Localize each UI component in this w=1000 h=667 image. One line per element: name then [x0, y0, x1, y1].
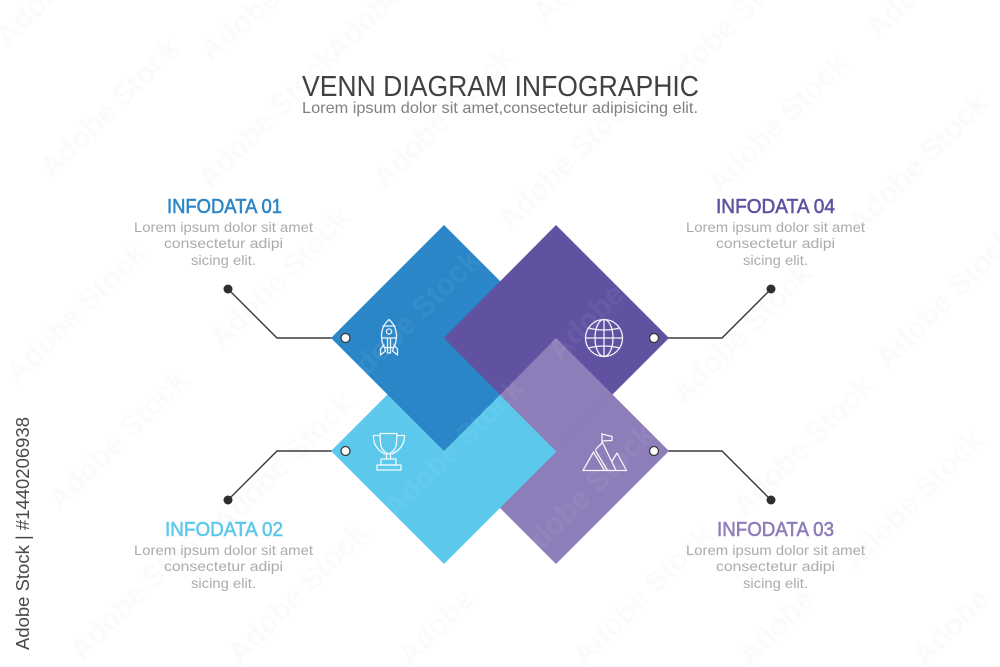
anchor dots [341, 334, 658, 456]
watermark pattern on background: Adobe Stock [64, 514, 217, 667]
diamond: light blue 02 [331, 338, 557, 564]
block: infodata 04 [686, 196, 865, 268]
block: infodata 03: INFODATA 03 [717, 519, 834, 541]
block: infodata 02: Lorem ipsum dolor sit amet [134, 542, 313, 558]
watermark pattern on background: Adobe Stock [34, 32, 187, 185]
block: infodata 01: consectetur adipi [164, 235, 283, 251]
watermark over diamonds: Adobe Stock [542, 214, 695, 367]
block: infodata 03: Lorem ipsum dolor sit amet [686, 542, 865, 558]
block: infodata 04: Lorem ipsum dolor sit amet [686, 219, 865, 235]
icon: rocket [380, 320, 398, 355]
diamond: light purple 03 [443, 338, 669, 564]
block: infodata 04: consectetur adipi [716, 235, 835, 251]
block: infodata 01: sicing elit. [191, 252, 256, 268]
block: infodata 01: Lorem ipsum dolor sit amet [134, 219, 313, 235]
block: infodata 01 [134, 196, 313, 268]
icon: globe [586, 320, 622, 356]
watermark pattern on background: Adobe Stock [0, 237, 153, 390]
watermark pattern on background: Adobe Stock [192, 42, 345, 195]
block: infodata 02 [134, 519, 313, 591]
stock id side label: Adobe Stock | #1440206938 [13, 417, 33, 650]
diamond: blue 01 [331, 225, 557, 451]
watermark pattern on background: Adobe Stock [222, 517, 375, 667]
diamond diagram [331, 225, 669, 564]
connector: infodata 02 [224, 451, 345, 504]
watermark pattern on background: Adobe Stock [492, 84, 645, 237]
block: infodata 04: sicing elit. [743, 252, 808, 268]
watermark over diamonds: Adobe Stock [508, 418, 661, 571]
block: infodata 03: sicing elit. [743, 575, 808, 591]
watermark pattern on background: Adobe Stock [702, 47, 855, 200]
watermark over diamonds [334, 214, 695, 571]
block: infodata 02: sicing elit. [191, 575, 256, 591]
watermark pattern on background: Adobe Stock [204, 202, 357, 355]
watermark pattern on background: Adobe Stock [367, 42, 520, 195]
block: infodata 02: consectetur adipi [164, 558, 283, 574]
watermark pattern on background: Adobe Stock [727, 370, 880, 523]
block: infodata 03 [686, 519, 865, 591]
connector: infodata 01 [224, 284, 345, 338]
watermark pattern on background: Adobe Stock [42, 364, 195, 517]
overlap: light purple over dark purple [500, 338, 612, 451]
watermark over diamonds: Adobe Stock [334, 244, 487, 397]
block: infodata 01: INFODATA 01 [167, 196, 282, 218]
connector: infodata 03 [654, 451, 776, 504]
block: infodata 02: INFODATA 02 [165, 519, 283, 541]
title: VENN DIAGRAM INFOGRAPHIC [302, 71, 699, 103]
diamond: dark purple 04 [444, 225, 669, 451]
watermark pattern on background: Adobe Stock [207, 387, 360, 540]
block: infodata 04: INFODATA 04 [716, 196, 835, 218]
subtitle: Lorem ipsum dolor sit amet,consectetur adipisicing elit. [302, 100, 698, 117]
icon: trophy [373, 434, 405, 470]
icon: mountain with flag [583, 434, 626, 470]
watermark over diamonds: Adobe Stock [378, 372, 531, 525]
connector: infodata 04 [654, 284, 776, 338]
watermark pattern on background: Adobe Stock [666, 257, 819, 410]
watermark pattern on background: Adobe Stock [837, 424, 990, 577]
watermark pattern on background: Adobe Stock [842, 87, 995, 240]
block: infodata 03: consectetur adipi [716, 558, 835, 574]
